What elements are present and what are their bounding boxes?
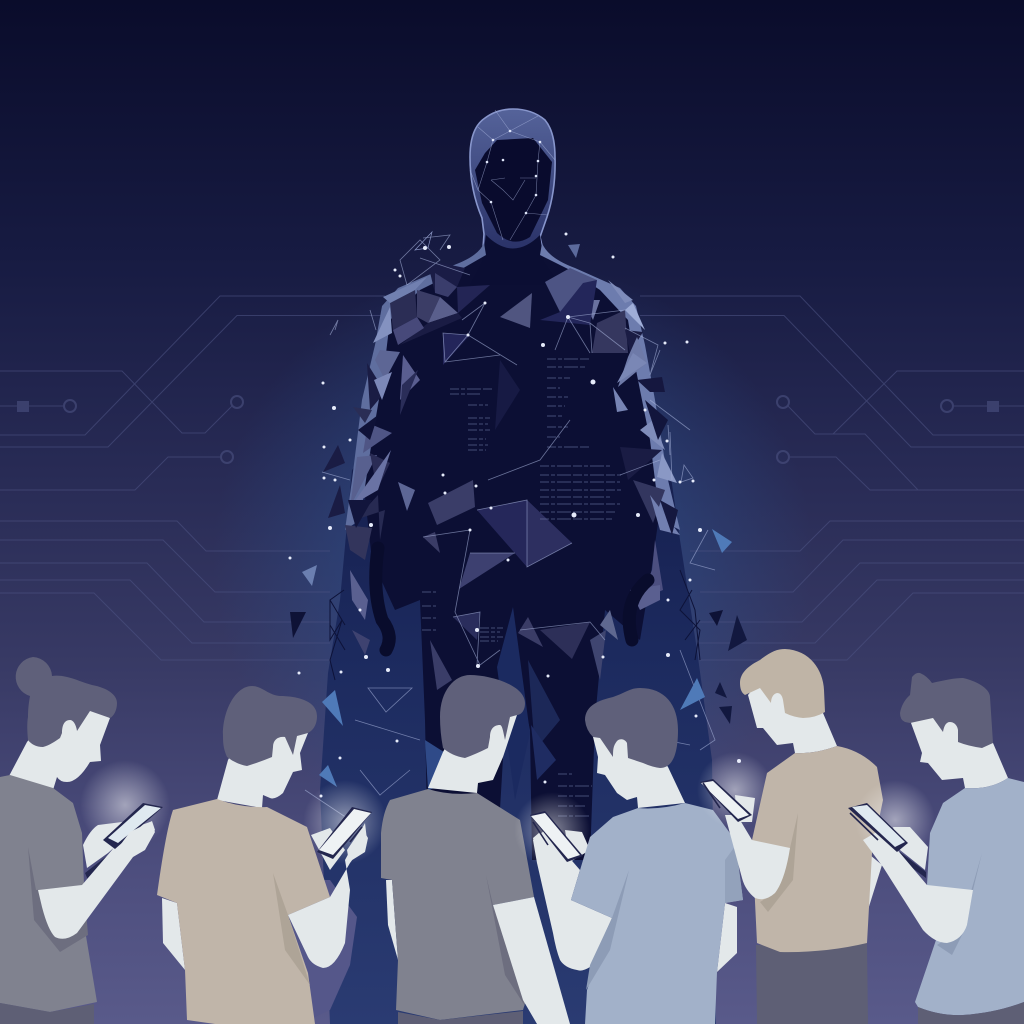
translucent drape shape behind arm [280, 880, 357, 1024]
fragments: torso and legs [423, 333, 618, 800]
forearm [725, 815, 790, 899]
figure: mesh lines [305, 235, 715, 820]
face mesh lines [470, 110, 555, 240]
phone glow [80, 760, 170, 850]
face mesh nodes [486, 130, 541, 214]
phone [530, 811, 583, 862]
back hand [83, 822, 125, 868]
figure: dark hands [376, 548, 648, 650]
hair [585, 688, 678, 768]
back hand [565, 830, 590, 862]
phone glow [514, 792, 590, 868]
skin: head and neck [217, 715, 308, 808]
figure: data text panels [422, 359, 622, 816]
left arm [162, 898, 185, 970]
phone [848, 803, 908, 852]
thumb and fingers [118, 821, 155, 856]
sleeve shadow [28, 847, 88, 952]
phone [700, 779, 752, 822]
hair [740, 649, 825, 718]
shirt [915, 778, 1024, 1015]
shirt [0, 775, 97, 1012]
back hand [893, 827, 928, 870]
forearm [493, 897, 570, 1024]
sleeve shadow [937, 853, 982, 955]
thumb shadow line [350, 827, 362, 842]
hair [440, 675, 525, 758]
dark strip under hand [896, 852, 926, 878]
sleeve shadow [586, 870, 629, 990]
figure: lit right shoulder edge [540, 243, 680, 530]
thumb shadow line [533, 822, 548, 845]
person 4: blue shirt [514, 688, 743, 1024]
figure: head [470, 109, 555, 250]
shirt [752, 746, 883, 952]
left arm [386, 880, 398, 960]
thumb and hand [347, 828, 368, 862]
circuit lines: right [640, 296, 1024, 660]
dark face mask [475, 138, 552, 242]
skin: head and neck [748, 680, 837, 753]
sleeve shadow [760, 813, 798, 912]
phone [317, 807, 372, 859]
shattered data figure [288, 109, 747, 1024]
forearm and hand [533, 830, 612, 971]
floating triangles: blue and dark [290, 232, 747, 787]
forearm [288, 823, 367, 968]
figure: dark body and legs [362, 243, 664, 860]
person 1: woman with bun, grey shirt [0, 657, 170, 1024]
shirt [381, 789, 534, 1020]
figure: lit shoulders and arm edges [345, 243, 486, 530]
phone screen [852, 805, 905, 847]
person 6: blue shirt, far right [848, 673, 1024, 1024]
thumb shadow line [703, 783, 720, 808]
fragments: right shoulder and arm [500, 268, 680, 610]
pants [756, 943, 868, 1024]
phone glow [303, 780, 387, 864]
phone screen [531, 813, 580, 859]
phone [103, 803, 163, 849]
circuit lines: left [0, 296, 385, 660]
phone screen [319, 809, 371, 855]
thumb [533, 832, 562, 868]
phone screen [108, 805, 161, 843]
pants [398, 1011, 523, 1024]
shirt [157, 799, 330, 1024]
right arm [717, 903, 737, 972]
back hand [311, 828, 345, 870]
hair [900, 673, 993, 748]
skin: head and neck [593, 725, 685, 808]
phone glow [697, 752, 773, 828]
skin: head and neck [428, 715, 517, 793]
hair with bun [16, 657, 117, 747]
figure: cloak drape [320, 400, 716, 1024]
phone screen [701, 781, 749, 819]
sleeve shadow [486, 875, 525, 1006]
person 2: tan shirt [157, 686, 387, 1024]
skin: head and neck [8, 700, 110, 790]
thumb shadow line [850, 813, 878, 840]
hair [223, 686, 317, 766]
fragments: left shoulder and arm [323, 260, 490, 655]
right arm [867, 855, 882, 913]
pants [918, 1002, 1024, 1024]
figure: neck dark fill [470, 235, 560, 285]
forearm [38, 822, 155, 939]
shirt [571, 803, 743, 1024]
cuff shadow [725, 845, 743, 903]
head outer shell [470, 109, 555, 250]
blue halo behind figure [210, 260, 820, 860]
scattered data particles [288, 232, 741, 798]
back hand [735, 795, 755, 822]
forearm [863, 830, 973, 943]
dark strip under hand [85, 852, 114, 880]
person 3: grey shirt, centre [381, 675, 570, 1024]
sleeve fold shadow [273, 873, 310, 985]
skin: head and neck [911, 700, 1008, 788]
pants [0, 1003, 94, 1024]
phone glow [855, 780, 935, 860]
figure: wire lattice at cloak edges [330, 570, 700, 680]
person 5: tan shirt, looking left [697, 649, 883, 1024]
